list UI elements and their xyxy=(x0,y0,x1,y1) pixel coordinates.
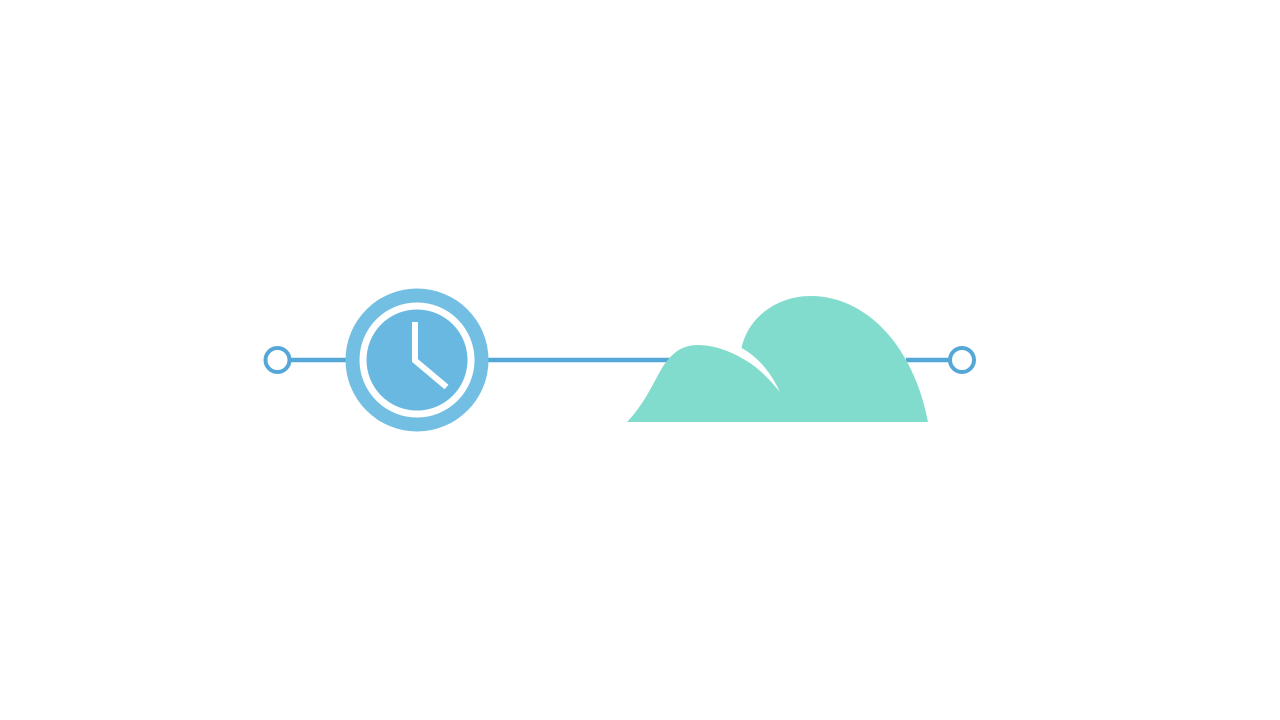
hills xyxy=(627,296,928,422)
right end node xyxy=(950,348,974,372)
icon: clock xyxy=(346,288,488,432)
timeline line xyxy=(288,358,952,362)
left end node xyxy=(266,348,290,372)
